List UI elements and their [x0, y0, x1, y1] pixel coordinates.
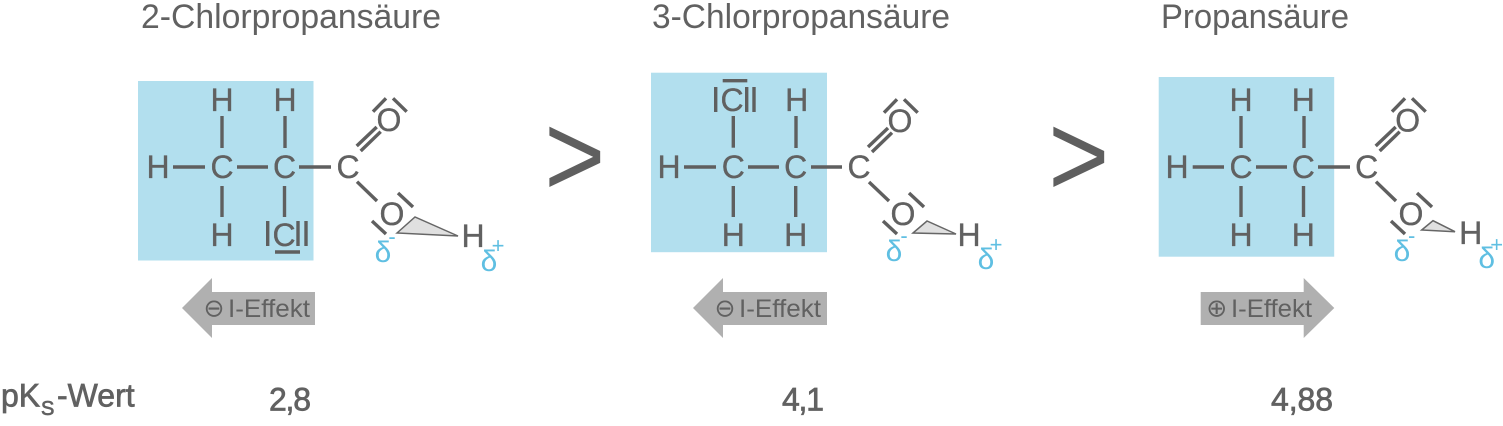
bonds	[684, 81, 924, 234]
partial charges: δ	[886, 235, 902, 268]
arrow: positive inductive effect: I-Effekt	[1231, 295, 1312, 323]
molecule structure	[146, 82, 504, 278]
atom labels	[1165, 82, 1482, 253]
partial charges: +	[990, 232, 1002, 257]
row label: pKs-Wert: -Wert	[57, 378, 135, 414]
partial charges: -	[900, 223, 908, 248]
highlighted region	[1159, 77, 1334, 257]
partial charges: δ	[1394, 235, 1410, 268]
partial charges: δ	[481, 245, 497, 278]
atom labels: O	[377, 102, 401, 138]
arrow: negative inductive effect: ⊖	[204, 294, 224, 322]
polar O-H wedge	[397, 217, 458, 236]
partial charges: +	[1490, 232, 1503, 257]
atom labels: H	[1459, 215, 1482, 251]
highlighted region	[138, 81, 314, 260]
pKs value: 4,88	[1271, 382, 1333, 418]
arrow: positive inductive effect	[1201, 278, 1334, 338]
greater-than sign: >	[1048, 89, 1109, 221]
bonds	[1193, 98, 1432, 234]
partial charges: δ	[978, 243, 994, 276]
arrow: negative inductive effect	[182, 278, 315, 338]
atom labels: H	[1165, 149, 1189, 185]
arrow: negative inductive effect: I-Effekt	[228, 295, 310, 323]
atom labels: C	[210, 149, 234, 185]
atom labels: O	[1399, 196, 1423, 232]
pKs value: 2,8	[269, 382, 311, 418]
row label: pKs-Wert: S	[41, 398, 54, 420]
polar O-H wedge	[913, 221, 956, 234]
atom labels: O	[380, 196, 404, 232]
partial charges: δ	[1478, 242, 1495, 275]
atom labels: H	[146, 149, 170, 185]
panel: 2-Chlorpropansäure	[138, 0, 504, 418]
atom labels	[146, 82, 485, 254]
atom labels: C	[722, 149, 745, 185]
atom labels: O	[891, 196, 915, 232]
atom labels: C	[1292, 149, 1315, 185]
atom labels: C	[847, 149, 871, 185]
arrow: negative inductive effect: I-Effekt	[739, 295, 821, 323]
atom labels: C	[272, 217, 296, 253]
atom labels: H	[1229, 217, 1253, 253]
atom labels: H	[657, 149, 681, 185]
partial charges	[886, 223, 1002, 276]
polar O-H wedge	[1422, 221, 1455, 232]
atom labels: H	[722, 217, 745, 253]
atom labels: H	[784, 217, 807, 253]
pKs value: 4,1	[782, 382, 824, 418]
atom labels: H	[1229, 82, 1253, 118]
atom labels: H	[210, 82, 234, 118]
atom labels: C	[1229, 149, 1253, 185]
panel: 3-Chlorpropansäure	[651, 0, 1002, 418]
atom labels: H	[273, 82, 297, 118]
atom labels: H	[461, 218, 485, 254]
molecule structure	[1165, 82, 1503, 275]
molecule structure	[657, 81, 1002, 276]
row label: pKs-Wert: pK	[1, 378, 40, 414]
atom labels: H	[210, 217, 234, 253]
partial charges	[1394, 223, 1503, 275]
partial charges: -	[1408, 223, 1415, 248]
atom labels	[657, 82, 981, 253]
partial charges: -	[388, 224, 396, 249]
atom labels: O	[1395, 102, 1420, 138]
partial charges: +	[492, 233, 504, 258]
greater-than sign: >	[544, 89, 605, 221]
atom labels: C	[1355, 149, 1378, 185]
arrow: negative inductive effect: ⊖	[715, 294, 735, 322]
atom labels: H	[1292, 82, 1315, 118]
bonds	[173, 98, 413, 252]
atom labels: H	[957, 217, 981, 253]
panel: Propansäure	[1159, 0, 1503, 418]
atom labels: C	[336, 149, 360, 185]
highlighted region	[651, 73, 827, 252]
partial charges	[375, 224, 504, 278]
partial charges: δ	[375, 236, 391, 269]
atom labels: H	[1292, 217, 1315, 253]
atom labels: H	[785, 82, 808, 118]
atom labels: C	[784, 149, 807, 185]
atom labels: O	[888, 103, 912, 139]
arrow: negative inductive effect	[693, 278, 827, 338]
atom labels: C	[720, 82, 744, 118]
arrow: positive inductive effect: ⊕	[1206, 294, 1227, 322]
atom labels: C	[273, 149, 296, 185]
